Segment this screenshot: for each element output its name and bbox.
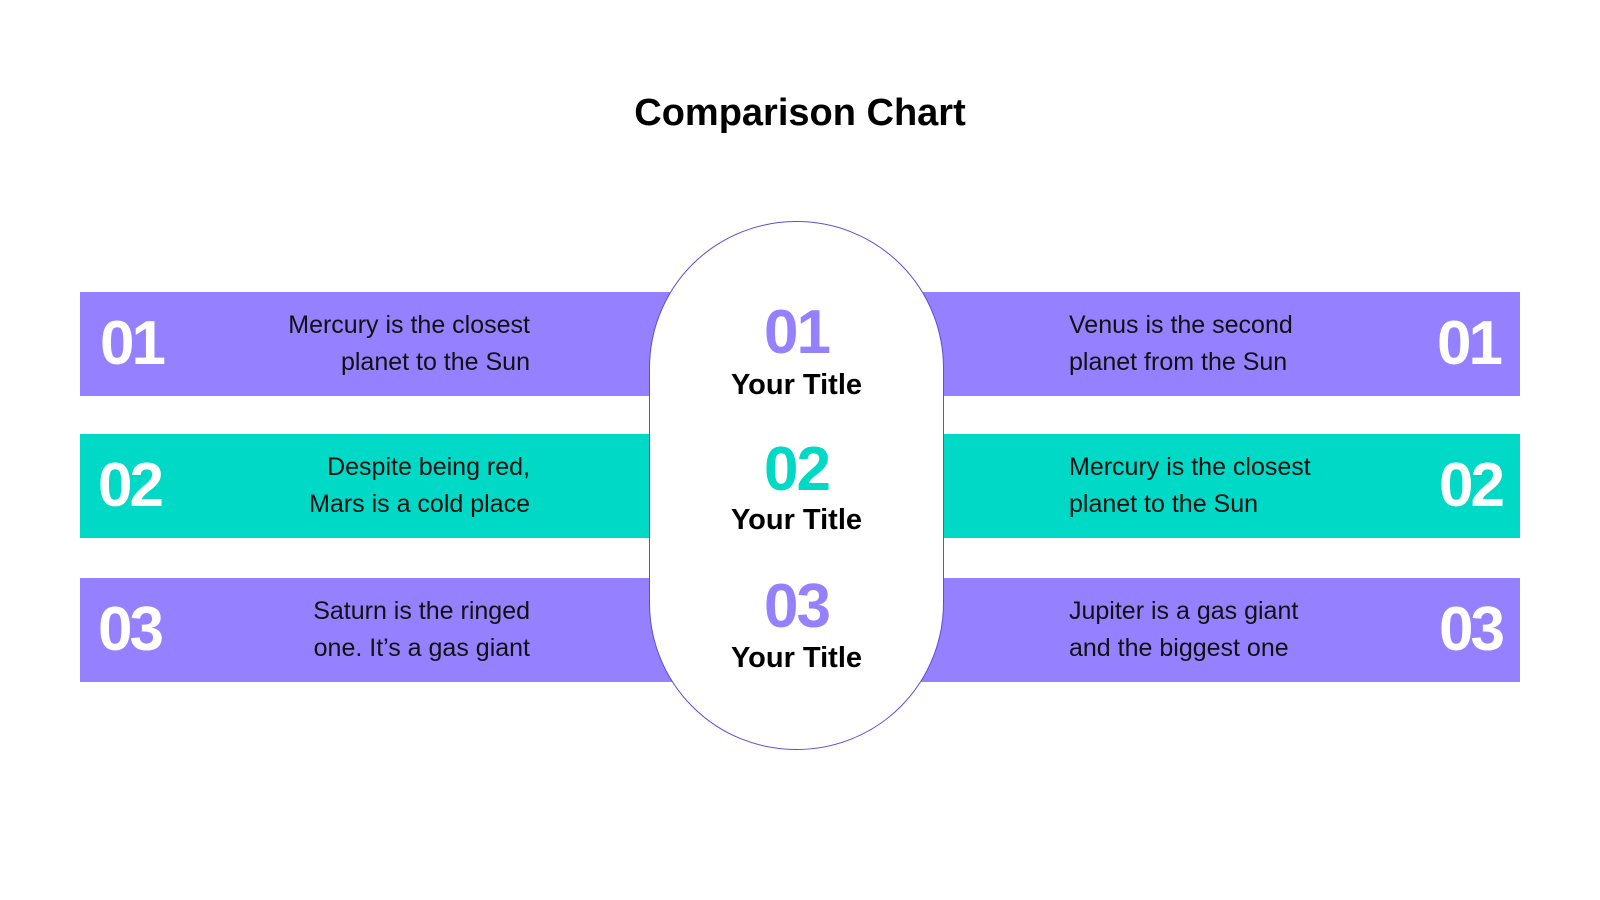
number left 01: 01 [100, 309, 163, 378]
center title 2: Your Title [731, 504, 862, 536]
text left 1 [288, 311, 530, 376]
center item 01: 01 [764, 298, 829, 367]
text left 3: Saturn is the ringed [313, 597, 530, 625]
bar 3 [80, 578, 1520, 682]
text left 2: Mars is a cold place [309, 490, 530, 518]
title: Comparison Chart [634, 92, 966, 134]
text left 3 [313, 597, 530, 662]
center title 1: Your Title [731, 369, 862, 401]
center title 3: Your Title [731, 642, 862, 674]
text left 3: one. It’s a gas giant [314, 634, 530, 662]
number left 03: 03 [98, 595, 161, 664]
text right 2: Mercury is the closest [1069, 453, 1311, 481]
text left 1: Mercury is the closest [288, 311, 530, 339]
number right 02: 02 [1439, 451, 1502, 520]
number left 02: 02 [98, 451, 161, 520]
text right 3 [1069, 597, 1298, 662]
text right 1: Venus is the second [1069, 311, 1293, 339]
text right 1 [1069, 311, 1293, 376]
text right 3: Jupiter is a gas giant [1069, 597, 1298, 625]
text right 2: planet to the Sun [1069, 490, 1258, 518]
text left 2: Despite being red, [327, 453, 530, 481]
center pill [649, 221, 944, 750]
text right 3: and the biggest one [1069, 634, 1289, 662]
text right 1: planet from the Sun [1069, 348, 1287, 376]
center item 02: 02 [764, 435, 829, 504]
number right 01: 01 [1437, 309, 1500, 378]
text right 2 [1069, 453, 1311, 518]
center item 03: 03 [764, 572, 829, 641]
bar 1 [80, 292, 1520, 396]
number right 03: 03 [1439, 595, 1502, 664]
text left 2 [309, 453, 530, 518]
text left 1: planet to the Sun [341, 348, 530, 376]
bar 2 [80, 434, 1520, 538]
